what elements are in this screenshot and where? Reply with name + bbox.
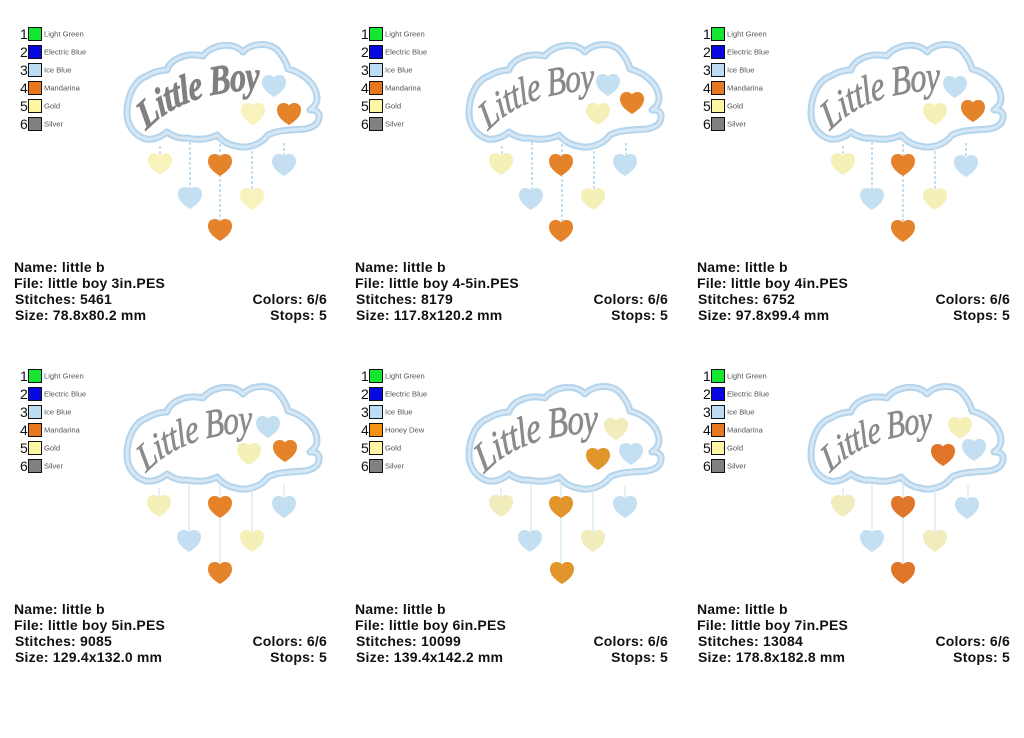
design info: Stops: 5 [611,307,668,323]
color legend: 4 [703,80,711,96]
cloud embroidery: Little Boy [474,408,598,474]
design info [697,259,1010,323]
color legend: Silver [727,462,746,470]
color legend: Silver [727,120,746,128]
design info: Stitches: 10099 [356,633,461,649]
cloud embroidery [466,383,665,584]
design info: File: little boy 4-5in.PES [355,275,519,291]
color legend: 4 [20,80,28,96]
design info: Size: 129.4x132.0 mm [15,649,162,665]
cloud embroidery: Little Boy [820,66,940,132]
design info: Name: little b [14,601,105,617]
color legend: Light Green [727,30,767,38]
color legend [703,26,769,132]
design info: Stops: 5 [611,649,668,665]
cloud embroidery: Little Boy [136,409,252,474]
color legend: 5 [20,98,28,114]
color legend: Mandarina [385,84,422,92]
design info: Name: little b [355,601,446,617]
design info: Stitches: 9085 [15,633,112,649]
design info: Name: little b [697,601,788,617]
color legend: 4 [361,422,369,438]
color legend: Honey Dew [385,426,425,434]
color legend: 2 [20,44,28,60]
design info: Stops: 5 [270,649,327,665]
panel: little boy 6in [355,368,668,665]
color legend: 6 [20,116,28,132]
design info: File: little boy 7in.PES [697,617,848,633]
color legend: Gold [385,444,401,452]
design info: Colors: 6/6 [935,291,1010,307]
design info [697,601,1010,665]
color legend: Ice Blue [727,66,754,74]
cloud embroidery: Little Boy [136,65,260,132]
design info: File: little boy 6in.PES [355,617,506,633]
color legend: 6 [361,458,369,474]
color legend: Electric Blue [727,48,769,56]
design info [14,259,327,323]
color legend: Electric Blue [44,48,86,56]
design info: Stitches: 5461 [15,291,112,307]
design info: Stops: 5 [953,649,1010,665]
color legend: 5 [703,440,711,456]
color legend: Electric Blue [727,390,769,398]
color legend: Ice Blue [385,66,412,74]
panel: little boy 3in [14,26,327,323]
design info: Stitches: 8179 [356,291,453,307]
color legend: 2 [361,44,369,60]
color legend: 1 [361,26,369,42]
color legend: 3 [703,404,711,420]
design info: File: little boy 3in.PES [14,275,165,291]
cloud embroidery [808,41,1007,242]
color legend: Silver [385,120,404,128]
color legend: 4 [703,422,711,438]
color legend [361,26,427,132]
cloud embroidery [124,383,323,584]
color legend: 4 [20,422,28,438]
cloud embroidery [124,41,323,241]
color legend: 2 [703,386,711,402]
color legend: 6 [20,458,28,474]
color legend: 3 [20,62,28,78]
design info [355,259,668,323]
color legend: 6 [361,116,369,132]
design info: Colors: 6/6 [593,633,668,649]
color legend: Gold [385,102,401,110]
color legend: Ice Blue [727,408,754,416]
panel: little boy 4-5in [355,26,668,323]
design info: Size: 139.4x142.2 mm [356,649,503,665]
cloud embroidery: Little Boy [478,67,594,132]
design info: Colors: 6/6 [252,633,327,649]
color legend: Ice Blue [44,66,71,74]
color legend: Silver [385,462,404,470]
color legend: Gold [44,102,60,110]
color legend: Gold [727,444,743,452]
color legend [361,368,427,474]
color legend [20,368,86,474]
design info [14,601,327,665]
color legend: 5 [20,440,28,456]
color legend: 1 [361,368,369,384]
color legend: Light Green [44,30,84,38]
color legend: 3 [20,404,28,420]
color legend: 5 [361,440,369,456]
cloud embroidery [808,383,1007,584]
design info: Name: little b [697,259,788,275]
color legend: 5 [703,98,711,114]
color legend: 5 [361,98,369,114]
design info: Colors: 6/6 [935,633,1010,649]
color legend: 2 [361,386,369,402]
color legend: Silver [44,462,63,470]
panel: little boy 4in [697,26,1010,323]
color legend: 1 [20,26,28,42]
panel: little boy 7in [697,368,1010,665]
color legend: Electric Blue [385,48,427,56]
color legend: 1 [20,368,28,384]
color legend: Gold [727,102,743,110]
design info: Colors: 6/6 [252,291,327,307]
color legend: 3 [361,62,369,78]
color legend: Mandarina [44,426,81,434]
design info: File: little boy 5in.PES [14,617,165,633]
color legend: Light Green [44,372,84,380]
design info: Name: little b [14,259,105,275]
design info: Stops: 5 [270,307,327,323]
color legend: 6 [703,116,711,132]
color legend: Mandarina [727,84,764,92]
color legend: Mandarina [44,84,81,92]
color legend: Ice Blue [44,408,71,416]
design info: Stops: 5 [953,307,1010,323]
color legend: 2 [20,386,28,402]
color legend: 6 [703,458,711,474]
color legend: 1 [703,368,711,384]
color legend: Electric Blue [44,390,86,398]
design info [355,601,668,665]
color legend: Mandarina [727,426,764,434]
color legend: Light Green [385,30,425,38]
color legend: 4 [361,80,369,96]
color legend: Silver [44,120,63,128]
design info: File: little boy 4in.PES [697,275,848,291]
color legend: 2 [703,44,711,60]
color legend: Light Green [385,372,425,380]
color legend: 1 [703,26,711,42]
color legend [20,26,86,132]
design info: Stitches: 6752 [698,291,795,307]
design info: Size: 178.8x182.8 mm [698,649,845,665]
design info: Size: 117.8x120.2 mm [356,307,502,323]
color legend: Light Green [727,372,767,380]
color legend: 3 [361,404,369,420]
color legend: Electric Blue [385,390,427,398]
color legend: 3 [703,62,711,78]
design info: Name: little b [355,259,446,275]
design info: Colors: 6/6 [593,291,668,307]
color legend: Ice Blue [385,408,412,416]
color legend: Gold [44,444,60,452]
design info: Size: 78.8x80.2 mm [15,307,146,323]
color legend [703,368,769,474]
panel: little boy 5in [14,368,327,665]
design info: Size: 97.8x99.4 mm [698,307,829,323]
design info: Stitches: 13084 [698,633,803,649]
cloud embroidery: Little Boy [820,410,932,474]
cloud embroidery [466,41,665,242]
